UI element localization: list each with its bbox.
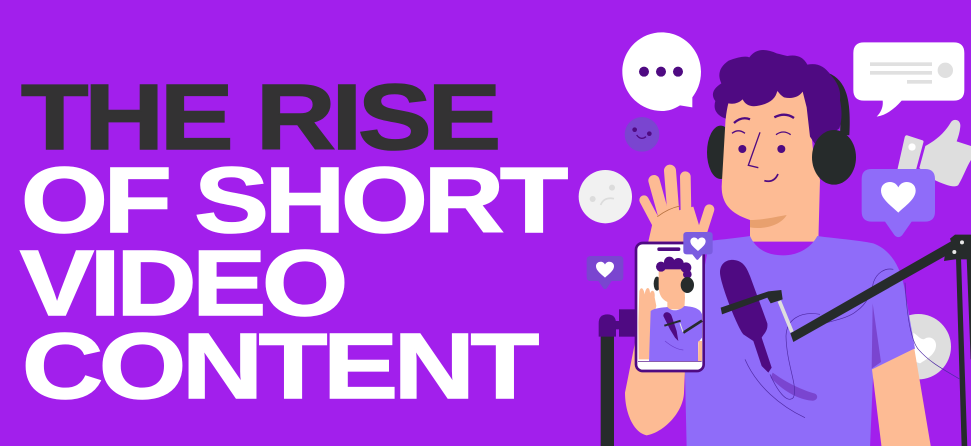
- clamp: [721, 290, 783, 314]
- icon: heart bubble large: [862, 169, 935, 237]
- mic shadow: [771, 373, 817, 401]
- headset band and left ear cup: [707, 77, 845, 179]
- phone: mini person: [638, 257, 702, 361]
- right microphone stand: [956, 258, 971, 446]
- hair: [713, 50, 842, 144]
- title: VIDEO: [20, 231, 344, 335]
- mic body: [720, 260, 772, 373]
- title: OF SHORT: [21, 148, 567, 252]
- t-shirt: [685, 236, 915, 446]
- small heart bubble on phone: [683, 232, 713, 260]
- title: [20, 65, 567, 418]
- palm line: [657, 206, 680, 217]
- boom arm: [790, 241, 956, 342]
- shirt sleeve shading: [872, 303, 881, 369]
- icon: thumbs up: [897, 120, 971, 186]
- illustration: podcaster scene: [579, 32, 971, 446]
- left forearm: [625, 343, 685, 435]
- cables: [745, 269, 960, 418]
- left microphone stand: [599, 309, 636, 446]
- waving hand: [644, 171, 712, 242]
- headphone disc behind arm: [886, 314, 951, 379]
- icon: text speech bubble: [853, 42, 964, 117]
- right ear cup: [812, 130, 856, 185]
- icon: sad emoji: [579, 170, 632, 223]
- face features: [732, 115, 794, 181]
- face and neck: [722, 87, 820, 242]
- icon: smile emoji: [625, 117, 659, 152]
- phone: [636, 243, 704, 371]
- title: CONTENT: [22, 314, 538, 418]
- right arm: [872, 349, 931, 446]
- title: THE RISE: [21, 65, 498, 169]
- silver rod: [779, 301, 792, 332]
- neck shadow: [750, 215, 787, 228]
- icon: typing speech bubble: [622, 32, 701, 111]
- boom joint: [944, 235, 971, 261]
- left heart bubble: [587, 256, 623, 289]
- microphone with boom arm: [720, 235, 971, 418]
